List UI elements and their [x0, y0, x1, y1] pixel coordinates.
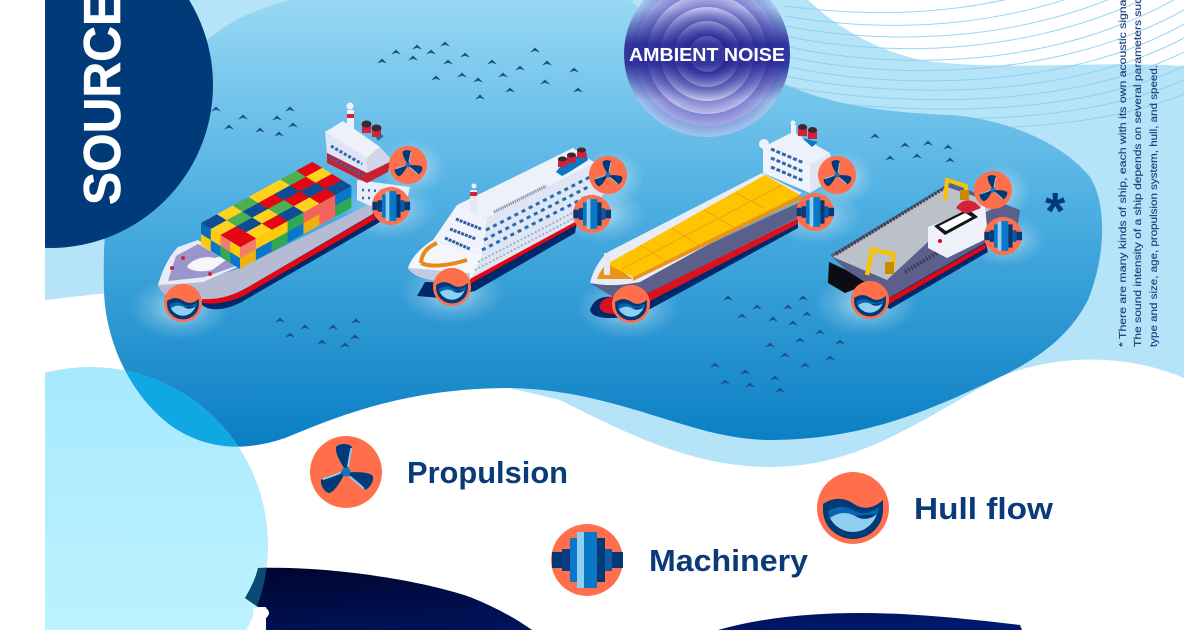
- background: thin sound wave lines: [785, 0, 1184, 128]
- containers: [201, 162, 352, 269]
- icon: propeller: [310, 436, 382, 508]
- footnote: The sound intensity of a ship depends on several parameters such as: [1133, 0, 1144, 347]
- water ripples around ships: [130, 140, 1045, 340]
- icon: machinery, cruise liner: [573, 195, 611, 233]
- overlap of ocean and pale circle: [125, 370, 238, 447]
- label: ambient noise: AMBIENT NOISE: [629, 45, 785, 65]
- icon: hull flow, cruise liner: [433, 268, 471, 306]
- icon: propeller, barge: [974, 171, 1012, 209]
- label: machinery: Machinery: [649, 543, 809, 578]
- dark silhouette: mouth: [245, 568, 1022, 630]
- icon: hull flow, barge: [851, 281, 889, 319]
- icon: machinery: [551, 524, 623, 596]
- superstructure: [759, 120, 835, 193]
- background: white top-right blob: [808, 0, 1184, 66]
- icon: propeller, container ship: [389, 146, 427, 184]
- icon: propeller, cruise liner: [589, 156, 627, 194]
- icon: hull flow: [817, 472, 889, 544]
- icon: propeller, bulk carrier: [818, 156, 856, 194]
- background: light blue wave band: [45, 0, 1184, 467]
- legend: machinery: [551, 524, 809, 596]
- asterisk: *: [1045, 183, 1066, 241]
- icon: hull flow, container ship: [164, 284, 202, 322]
- footnote: [1118, 0, 1160, 347]
- label: hull flow: Hull flow: [914, 491, 1054, 526]
- superstructure: [325, 102, 410, 207]
- ship: cruise liner: [408, 148, 606, 298]
- ocean blob: [104, 0, 1102, 447]
- icon: machinery, bulk carrier: [796, 193, 834, 231]
- head silhouette: pale circle: [45, 367, 268, 630]
- ship: container ship: [158, 102, 410, 309]
- label: propulsion: Propulsion: [407, 455, 568, 490]
- legend: hull flow: [817, 472, 1054, 544]
- legend: propulsion: [310, 436, 568, 508]
- footnote: type and size, age, propulsion system, hull, and speed.: [1149, 65, 1160, 347]
- ship: barge with cranes: [828, 180, 1020, 309]
- small wave marks: [211, 42, 955, 392]
- panel: source semicircle: [45, 0, 213, 248]
- footnote: * There are many kinds of ship, each with its own acoustic signature.: [1118, 0, 1129, 347]
- ship: bulk carrier: [590, 120, 835, 318]
- icon: ambient noise rings: [624, 0, 790, 137]
- icon: machinery, barge: [984, 217, 1022, 255]
- icon: hull flow, bulk carrier: [612, 285, 650, 323]
- icon: machinery, container ship: [372, 187, 410, 225]
